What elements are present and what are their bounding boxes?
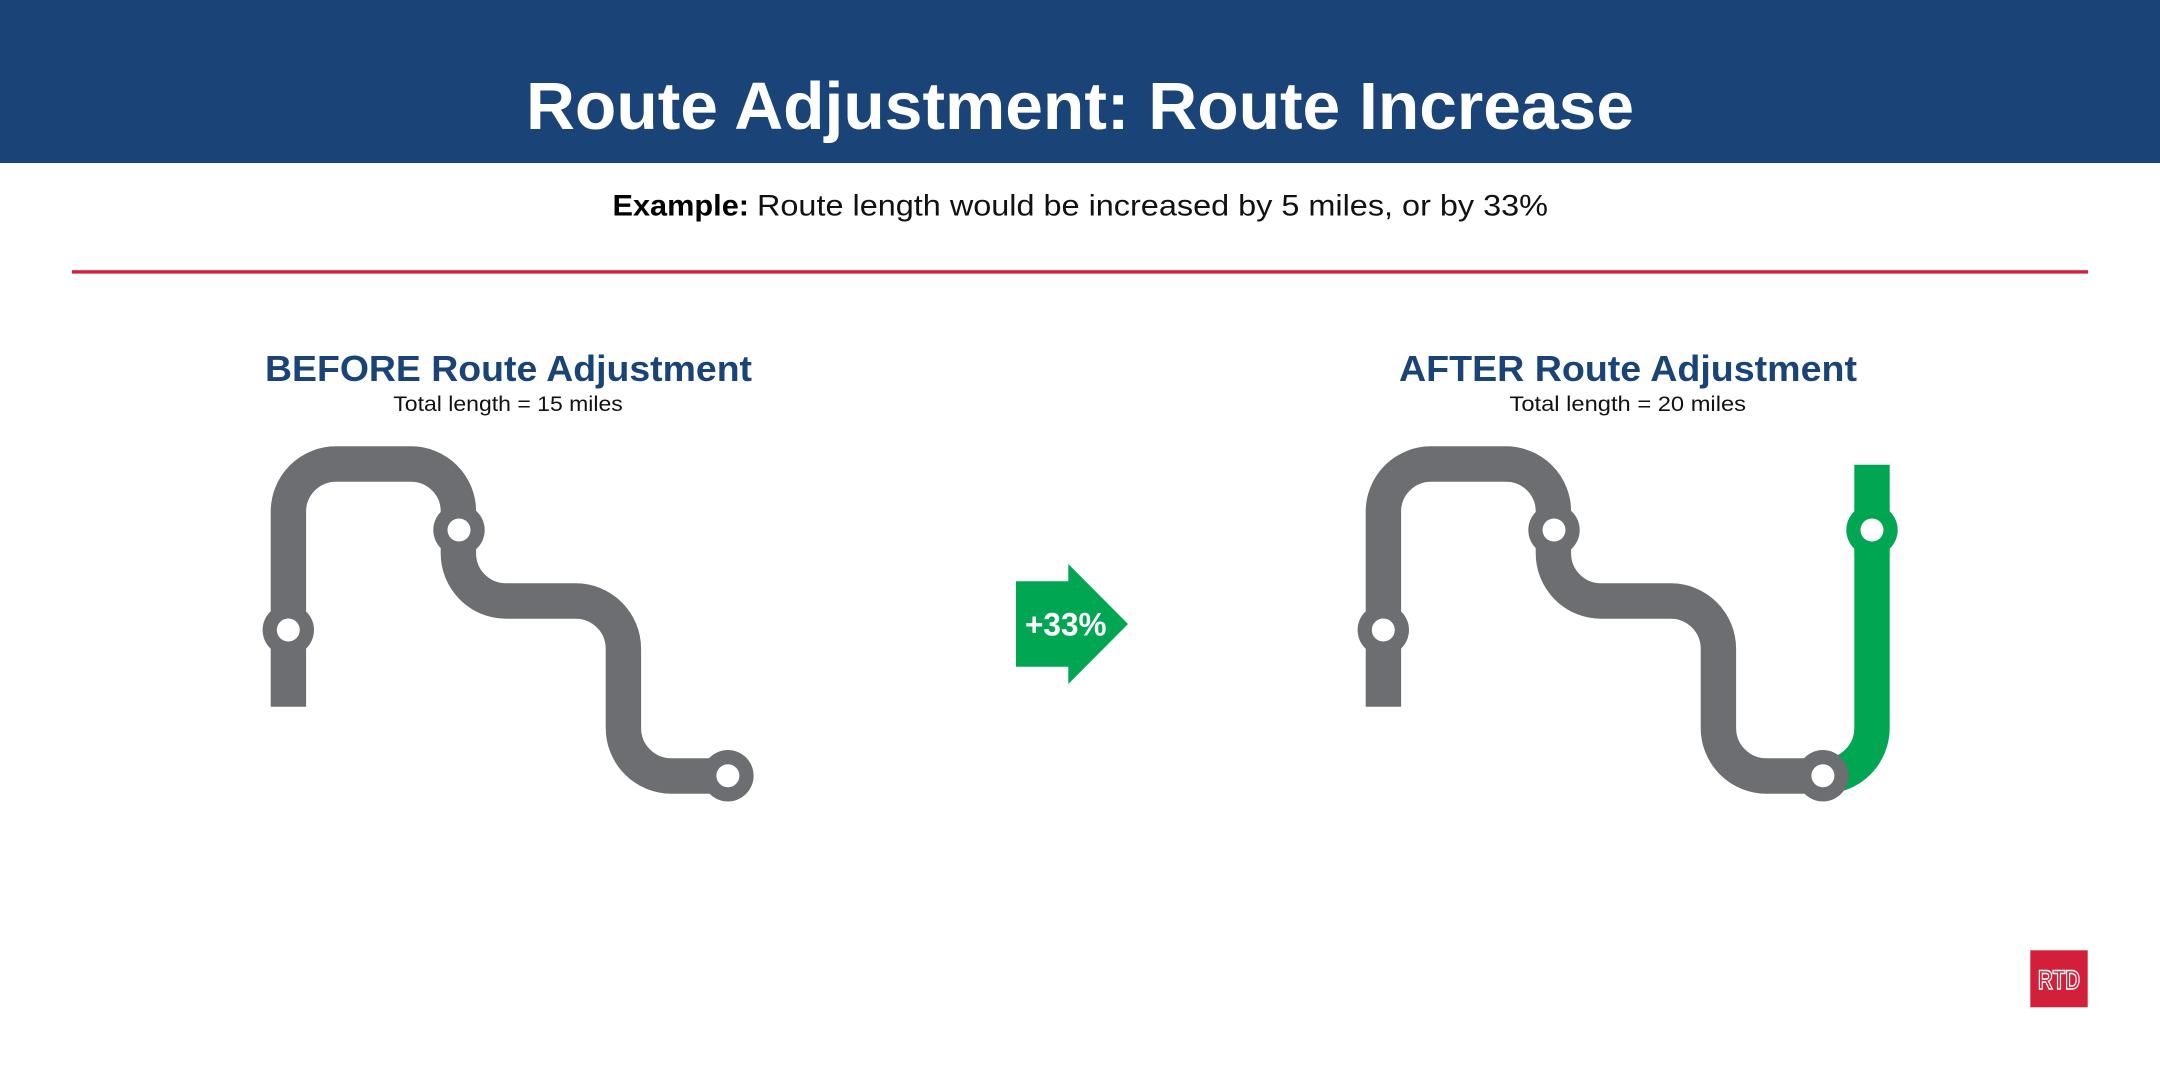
arrow label: +33% [1025, 607, 1106, 643]
example description: Route length would be increased by 5 miles, or by 33% [757, 190, 1548, 222]
before route line [263, 464, 754, 801]
RTD logo [2030, 950, 2088, 1007]
panel: before route adjustment [263, 348, 754, 801]
example text: Example: [612, 190, 749, 222]
before heading: BEFORE Route Adjustment [265, 348, 752, 389]
station [1528, 504, 1580, 556]
existing route line [1358, 464, 1849, 801]
station [1358, 604, 1409, 656]
after heading: AFTER Route Adjustment [1399, 348, 1857, 389]
junction station [1797, 750, 1849, 801]
station [263, 604, 314, 656]
title: Route Adjustment: Route Increase [526, 69, 1634, 144]
new station [1846, 504, 1898, 556]
logo text: RTD [2038, 965, 2080, 995]
after total length: Total length = 20 miles [1510, 392, 1746, 416]
before total length: Total length = 15 miles [393, 392, 623, 416]
terminal station [702, 750, 754, 801]
added route extension [1824, 465, 1898, 776]
panel: after route adjustment [1358, 348, 1898, 801]
header banner [0, 0, 2160, 163]
station [433, 504, 485, 556]
arrow: +33% [1016, 564, 1128, 684]
